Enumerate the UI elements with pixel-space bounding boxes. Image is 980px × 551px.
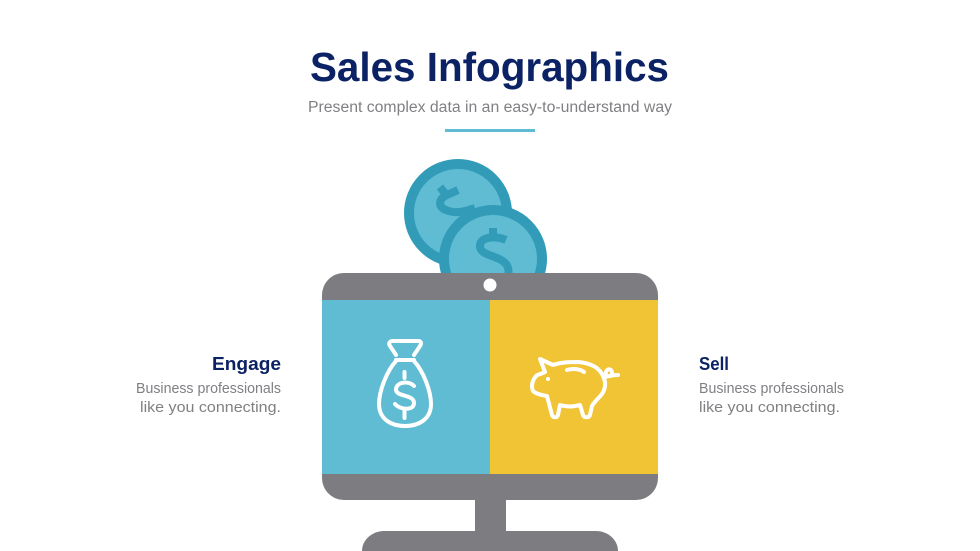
icon: coins <box>409 164 542 308</box>
title: Sales Infographics <box>310 44 669 90</box>
stand base <box>362 531 618 551</box>
icon: money bag <box>379 341 431 426</box>
front coin <box>444 210 542 308</box>
stand neck <box>475 495 506 535</box>
text block: engage: Business professionals <box>136 381 281 397</box>
text block: engage: Engage <box>212 354 281 374</box>
text block: sell: Sell <box>699 354 729 374</box>
text block: sell: Business professionals <box>699 381 844 397</box>
accent line <box>445 129 535 132</box>
text block: engage <box>136 354 281 416</box>
back coin <box>409 164 507 262</box>
subtitle: Present complex data in an easy-to-understand way <box>308 99 672 116</box>
panel: engage screen <box>322 300 490 474</box>
text block: engage: like you connecting. <box>140 400 281 416</box>
monitor frame <box>322 273 658 500</box>
text block: sell: like you connecting. <box>699 400 840 416</box>
camera dot <box>484 278 496 292</box>
text block: sell <box>699 354 844 416</box>
panel: sell screen <box>490 300 658 474</box>
icon: piggy bank <box>532 359 618 417</box>
monitor <box>322 273 658 551</box>
